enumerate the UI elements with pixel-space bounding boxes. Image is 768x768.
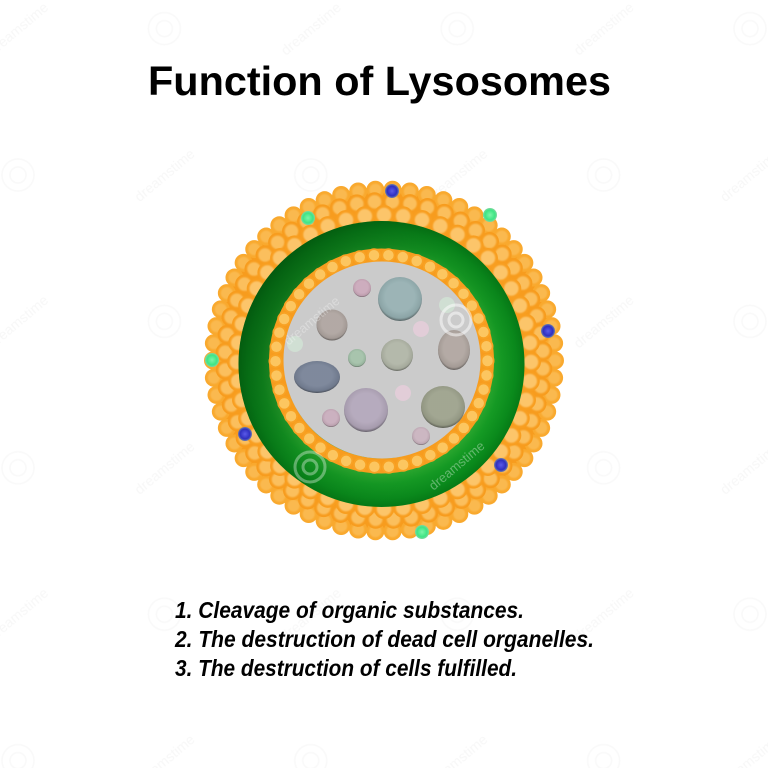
list item 1: 1. Cleavage of organic substances. [175, 597, 524, 623]
watermark spirals and text over diagram [281, 293, 488, 493]
watermark spirals and text over diagram: dreamstime [281, 293, 343, 348]
organelle: tan oval right [438, 330, 470, 370]
title: Function of Lysosomes [148, 58, 611, 104]
organelle: small pink vesicle lower left [322, 409, 340, 427]
organelles [287, 277, 470, 445]
inner orange bubble ring [276, 255, 488, 467]
membrane proteins: green [205, 208, 497, 539]
lumen: grey interior [284, 262, 480, 458]
membrane proteins: blue [238, 184, 555, 472]
list item 2: 2. The destruction of dead cell organelles. [174, 626, 594, 652]
organelle: small green vesicle [348, 349, 366, 367]
outer membrane: orange bubble layer [212, 188, 556, 532]
organelle: olive vesicle centre [381, 339, 413, 371]
organelle: pale green vesicles [287, 297, 455, 352]
numbered function list [174, 597, 594, 681]
organelle: teal vesicle [378, 277, 422, 321]
list item 3: 3. The destruction of cells fulfilled. [175, 655, 517, 681]
organelle: pale pink vesicles [395, 321, 429, 401]
green membrane ring [238, 221, 524, 507]
lysosome diagram [205, 184, 556, 539]
organelle: dark blue oval [294, 361, 340, 393]
organelle: brown vesicle [316, 310, 348, 340]
watermark spirals and text over diagram: dreamstime [426, 438, 488, 493]
organelle: large olive vesicle [421, 386, 465, 428]
organelle: large purple vesicle [344, 388, 388, 432]
organelle: small pink vesicle top [353, 279, 371, 297]
organelle: small pink vesicle bottom [412, 427, 430, 445]
